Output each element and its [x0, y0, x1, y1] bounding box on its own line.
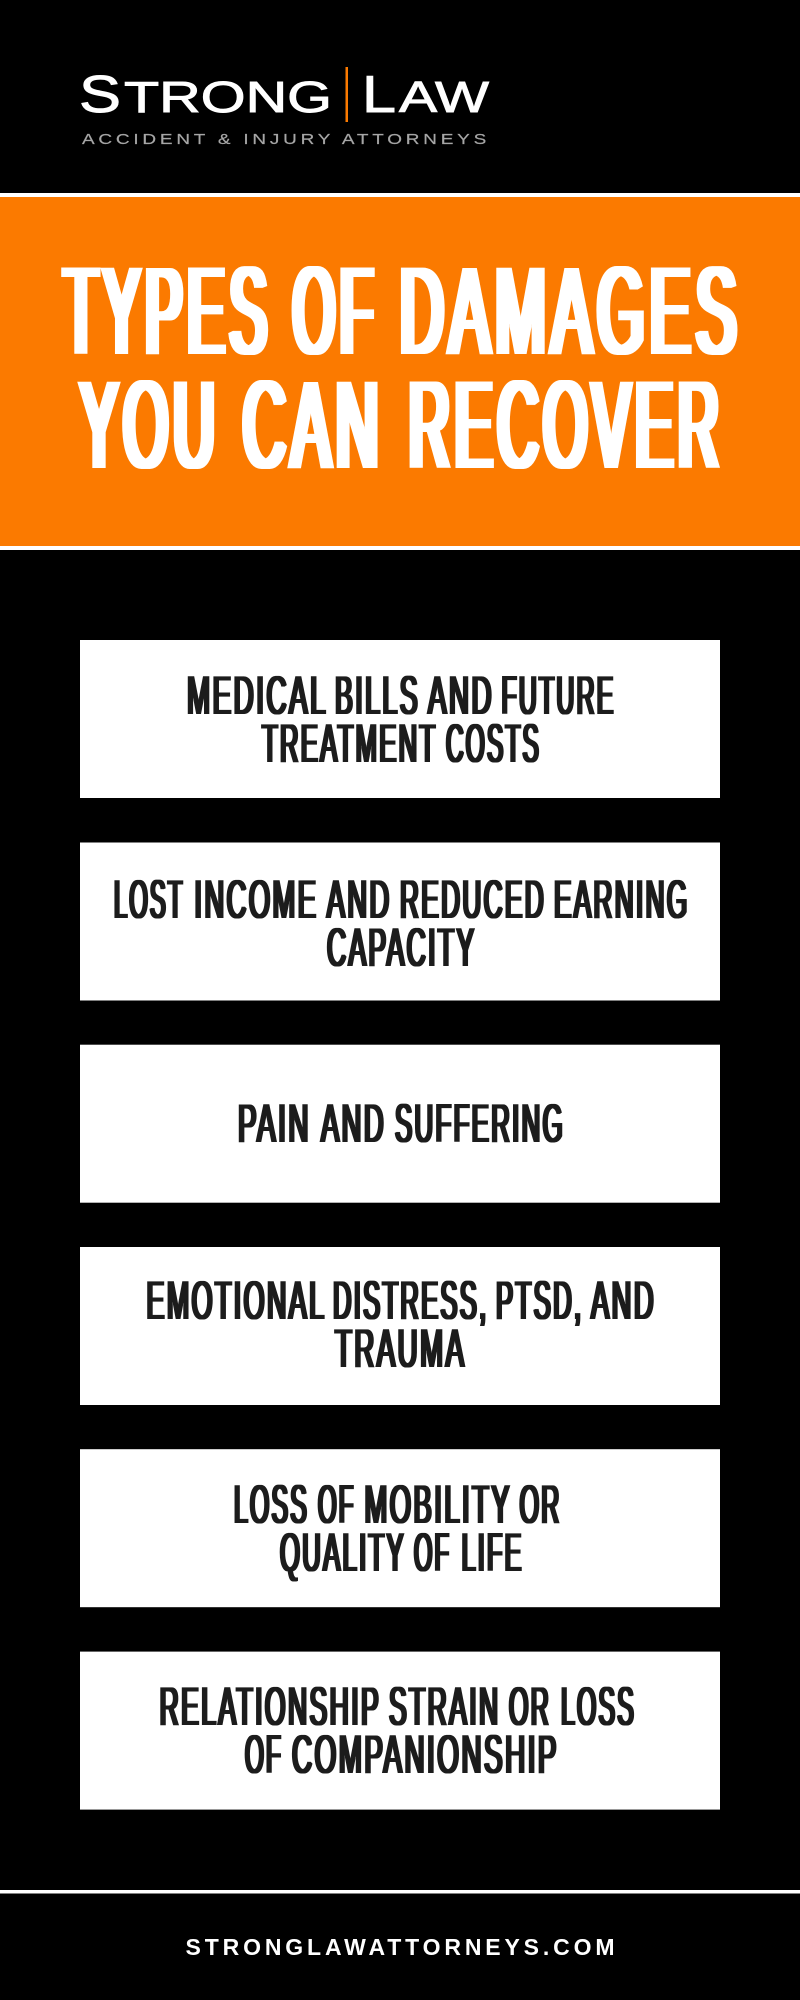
panel: emotional distress: TRAUMA	[335, 1317, 466, 1379]
panel: medical bills: MEDICAL	[187, 664, 327, 726]
panel: pain and suffering: PAIN	[238, 1092, 311, 1154]
panel: lost income: CAPACITY	[327, 916, 476, 978]
panel: loss of mobility: OR	[520, 1473, 562, 1535]
panel: medical bills	[80, 640, 720, 798]
banner top rule	[0, 193, 800, 197]
panel: relationship strain	[80, 1652, 720, 1810]
panel: emotional distress: AND	[591, 1269, 656, 1331]
panel: loss of mobility: QUALITY	[280, 1521, 406, 1583]
footer	[0, 1890, 800, 1960]
panel: loss of mobility: LOSS	[234, 1473, 309, 1535]
panel: medical bills: TREATMENT	[262, 712, 437, 774]
title line 2: CAN	[243, 356, 384, 495]
title line 2: YOU	[80, 356, 220, 495]
logo divider	[346, 67, 348, 122]
logo	[79, 66, 490, 148]
logo wordmark: Law: AW	[399, 73, 490, 122]
panel: lost income	[80, 842, 720, 1000]
panel: relationship strain: RELATIONSHIP	[160, 1675, 381, 1737]
panel: lost income: INCOME	[194, 868, 318, 930]
panel: pain and suffering: AND	[321, 1092, 386, 1154]
panel: relationship strain: LOSS	[561, 1675, 636, 1737]
panel: pain and suffering: SUFFERING	[395, 1092, 565, 1154]
panel: medical bills: BILLS	[335, 664, 420, 726]
logo wordmark: Law: L	[362, 66, 396, 124]
panel: relationship strain: STRAIN	[389, 1675, 500, 1737]
panel: loss of mobility: OF	[414, 1521, 451, 1583]
panel: loss of mobility: OF	[318, 1473, 356, 1535]
panel: pain and suffering	[80, 1045, 720, 1203]
footer website: STRONGLAWATTORNEYS.COM	[186, 1934, 614, 1960]
logo wordmark: Strong: S	[79, 66, 121, 124]
title banner	[0, 193, 800, 550]
panel: medical bills: AND	[428, 664, 494, 726]
panel: relationship strain: OF	[245, 1723, 283, 1785]
panel: lost income: REDUCED	[400, 868, 546, 930]
panel: medical bills: COSTS	[446, 712, 541, 774]
panel: emotional distress: PTSD,	[496, 1269, 584, 1331]
panel: emotional distress: DISTRESS,	[333, 1269, 488, 1331]
panel: loss of mobility	[80, 1449, 720, 1607]
panel: lost income: LOST	[114, 868, 184, 930]
title line 1: OF	[293, 242, 378, 381]
panel: medical bills: FUTURE	[502, 664, 616, 726]
panel: lost income: AND	[327, 868, 392, 930]
panel: loss of mobility: LIFE	[462, 1521, 524, 1583]
panel: emotional distress	[80, 1247, 720, 1405]
banner background	[0, 197, 800, 546]
banner bottom rule	[0, 546, 800, 550]
logo wordmark: Strong: TRONG	[124, 73, 332, 122]
logo tagline: ACCIDENT & INJURY ATTORNEYS	[82, 131, 490, 148]
title line 1: TYPES	[64, 242, 272, 381]
panel: loss of mobility: MOBILITY	[364, 1473, 512, 1535]
footer rule	[0, 1890, 800, 1894]
panel: relationship strain: OR	[509, 1675, 551, 1737]
panel: emotional distress: EMOTIONAL	[146, 1269, 326, 1331]
